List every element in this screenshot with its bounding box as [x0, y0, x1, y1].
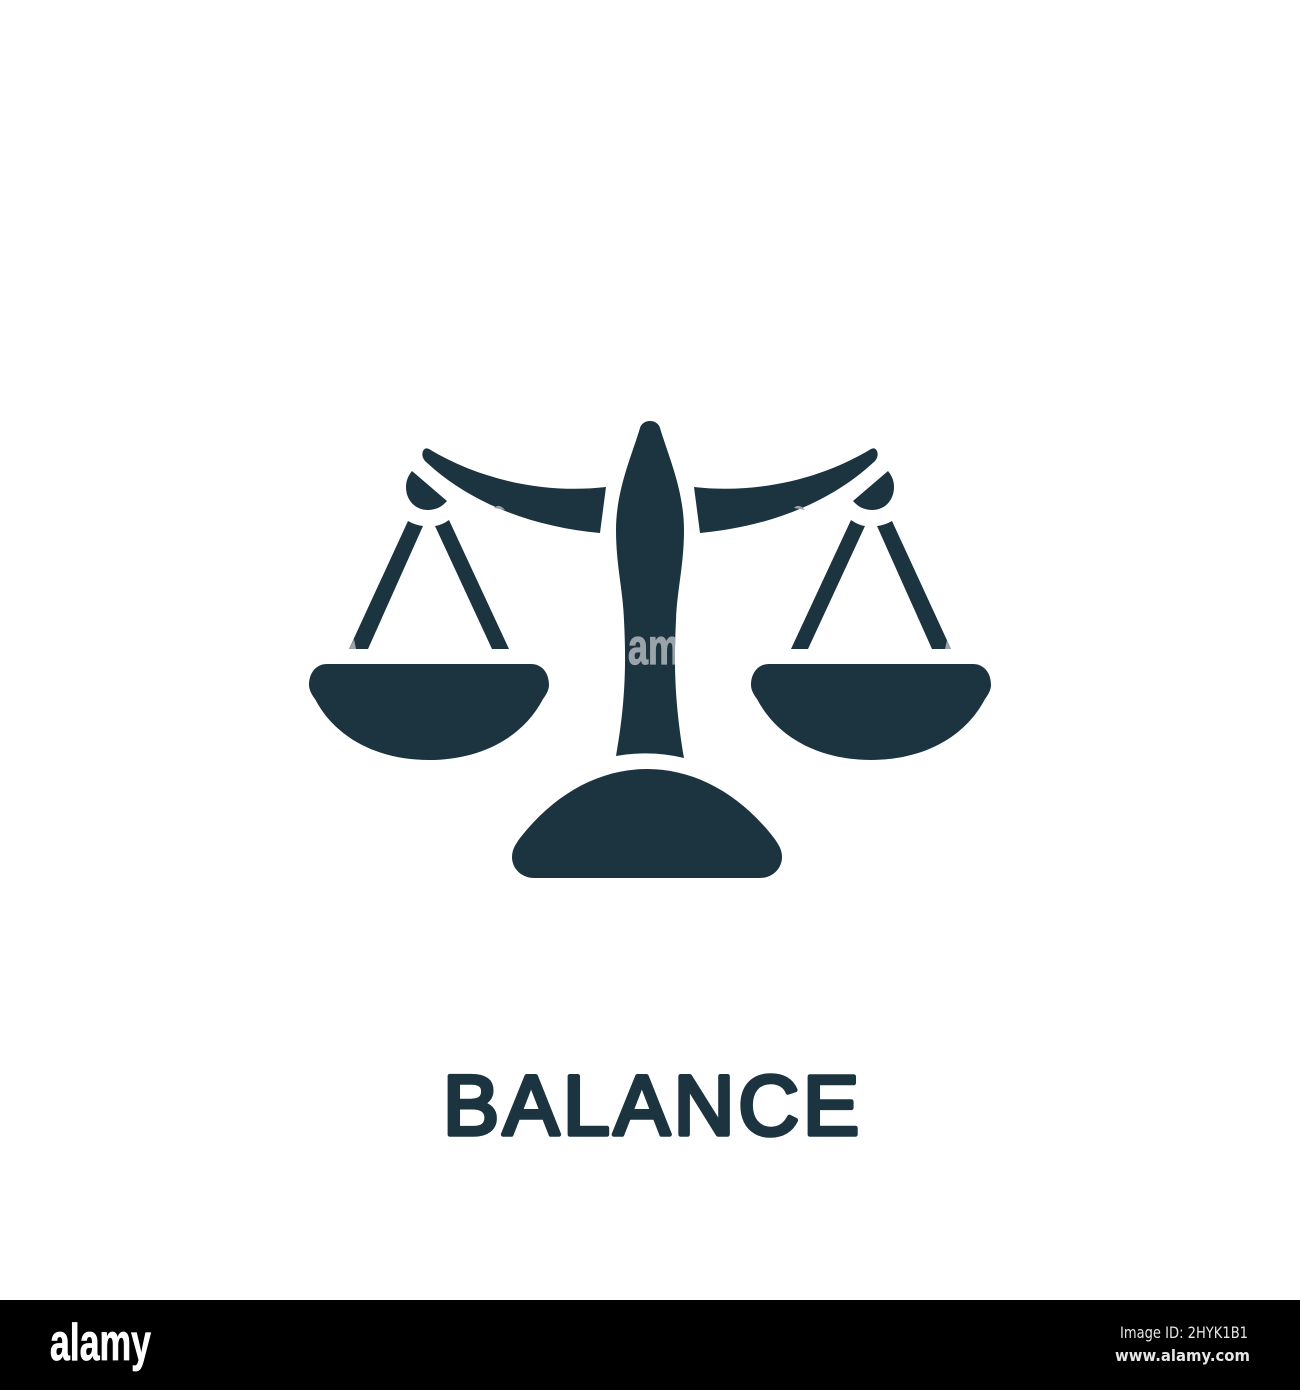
right pan: [751, 664, 991, 760]
right pivot: [853, 471, 894, 510]
right beam arm: [694, 448, 878, 533]
logo: alamy: alamy: [50, 1314, 151, 1372]
watermark specks: [349, 506, 951, 649]
left pan rods: [349, 520, 509, 649]
image id: Image ID: 2HYK1B1: [1120, 1323, 1248, 1342]
left beam arm: [422, 448, 606, 533]
dome base: [512, 769, 782, 878]
title: BALANCE: BALANCE: [443, 1058, 859, 1152]
infographic canvas: [0, 421, 1300, 1390]
watermark text on stem: am: [628, 619, 680, 675]
website: www.alamy.com: [1115, 1346, 1250, 1365]
watermark fragments: [349, 506, 951, 675]
footer band: [0, 1300, 1300, 1390]
right pan rods: [791, 520, 951, 649]
central stem: [616, 421, 684, 758]
left pivot: [406, 471, 447, 510]
left pan: [309, 664, 549, 760]
icon: balance scales: [309, 421, 991, 878]
